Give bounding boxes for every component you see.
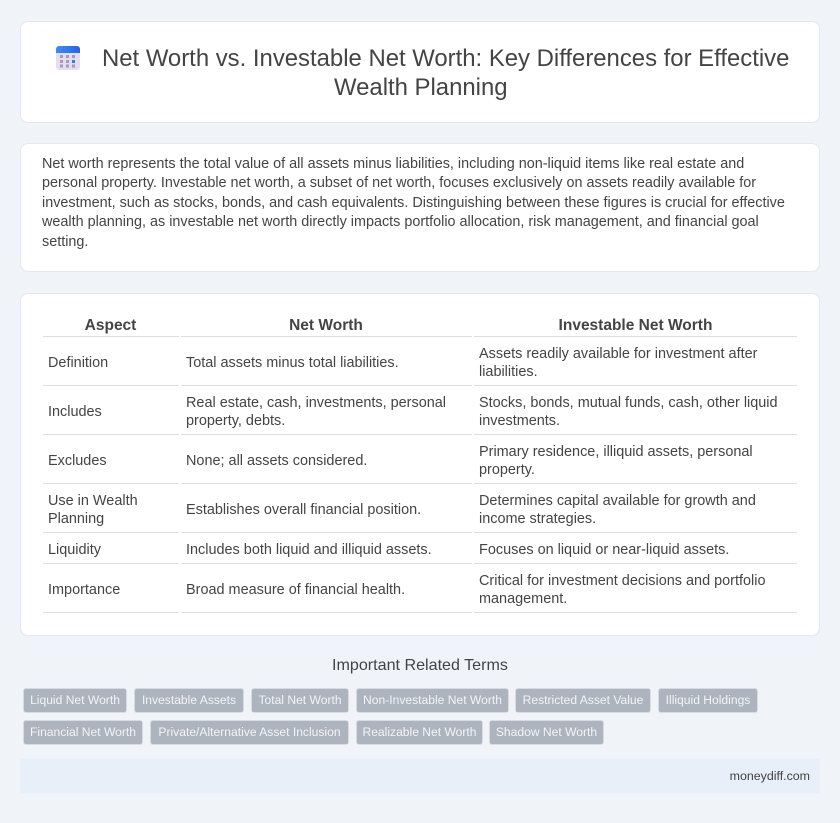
- text block: introduction: personal property. Investable net worth, a subset of net worth, focuses exclusively on assets readily available for: [42, 175, 756, 191]
- table header: Investable Net Worth: Investable Net Worth: [559, 317, 712, 334]
- text: None; all assets considered.: [186, 453, 367, 469]
- title: [102, 45, 789, 101]
- table header: Aspect: Aspect: [85, 317, 136, 334]
- row: Liquidity: [48, 542, 729, 558]
- tags: related terms: Investable Assets: [142, 693, 236, 707]
- icon: calendar: [56, 46, 80, 70]
- panel: comparison table: [20, 293, 820, 636]
- text: Includes: [48, 404, 102, 420]
- text block: introduction: setting.: [42, 234, 88, 250]
- text: liabilities.: [479, 364, 538, 380]
- table header: Net Worth: Net Worth: [289, 317, 363, 334]
- panel: introduction: [20, 143, 820, 272]
- text: Real estate, cash, investments, personal: [186, 395, 446, 411]
- text: Assets readily available for investment after: [479, 346, 757, 362]
- row: Definition: [48, 346, 758, 380]
- text: investments.: [479, 413, 560, 429]
- text: Total assets minus total liabilities.: [186, 355, 399, 371]
- text: Definition: [48, 355, 108, 371]
- heading: Important Related Terms: Important Related Terms: [332, 656, 508, 674]
- text: Broad measure of financial health.: [186, 582, 405, 598]
- text block: introduction: investment, such as stocks, bonds, and cash equivalents. Distinguishing between these figures is crucial for effective: [42, 195, 785, 211]
- text: Liquidity: [48, 542, 101, 558]
- text block: introduction: wealth planning, as investable net worth directly impacts portfolio allocation, risk management, and financial goal: [42, 214, 759, 230]
- tags: related terms: Liquid Net Worth: [30, 693, 120, 707]
- tags: related terms: Illiquid Holdings: [666, 693, 750, 707]
- text: property.: [479, 462, 535, 478]
- text: Excludes: [48, 453, 107, 469]
- text: Primary residence, illiquid assets, personal: [479, 444, 753, 460]
- text: Stocks, bonds, mutual funds, cash, other liquid: [479, 395, 778, 411]
- tags: related terms: Realizable Net Worth: [362, 725, 477, 739]
- text: property, debts.: [186, 413, 285, 429]
- text: Determines capital available for growth and: [479, 493, 756, 509]
- row: Use in Wealth Planning: [48, 493, 756, 527]
- row: Includes: [48, 395, 778, 429]
- tags: related terms: Shadow Net Worth: [496, 725, 597, 739]
- tags: related terms: Non-Investable Net Worth: [363, 693, 502, 707]
- text: management.: [479, 591, 567, 607]
- row: Excludes: [48, 444, 753, 478]
- title: Net Worth vs. Investable Net Worth: Key Differences for Effective: [102, 45, 789, 72]
- title: Wealth Planning: [334, 74, 508, 101]
- row: Importance: [48, 573, 765, 607]
- text block: introduction: [42, 156, 785, 250]
- text: Includes both liquid and illiquid assets.: [186, 542, 432, 558]
- text: Importance: [48, 582, 120, 598]
- footer bar: moneydiff.com: [730, 769, 810, 783]
- text: Planning: [48, 511, 104, 527]
- text: income strategies.: [479, 511, 596, 527]
- tags: related terms: Restricted Asset Value: [523, 693, 643, 707]
- text: Critical for investment decisions and portfolio: [479, 573, 765, 589]
- tags: related terms: Financial Net Worth: [30, 725, 136, 739]
- text: Use in Wealth: [48, 493, 138, 509]
- panel: title card: [20, 21, 820, 123]
- tags: related terms: [23, 688, 758, 745]
- footer bar: [20, 759, 820, 793]
- text block: introduction: Net worth represents the total value of all assets minus liabilities, including non-liquid items like real estate and: [42, 156, 744, 172]
- text: Establishes overall financial position.: [186, 502, 421, 518]
- tags: related terms: Total Net Worth: [258, 693, 342, 707]
- text: Focuses on liquid or near-liquid assets.: [479, 542, 729, 558]
- tags: related terms: Private/Alternative Asset Inclusion: [158, 725, 341, 739]
